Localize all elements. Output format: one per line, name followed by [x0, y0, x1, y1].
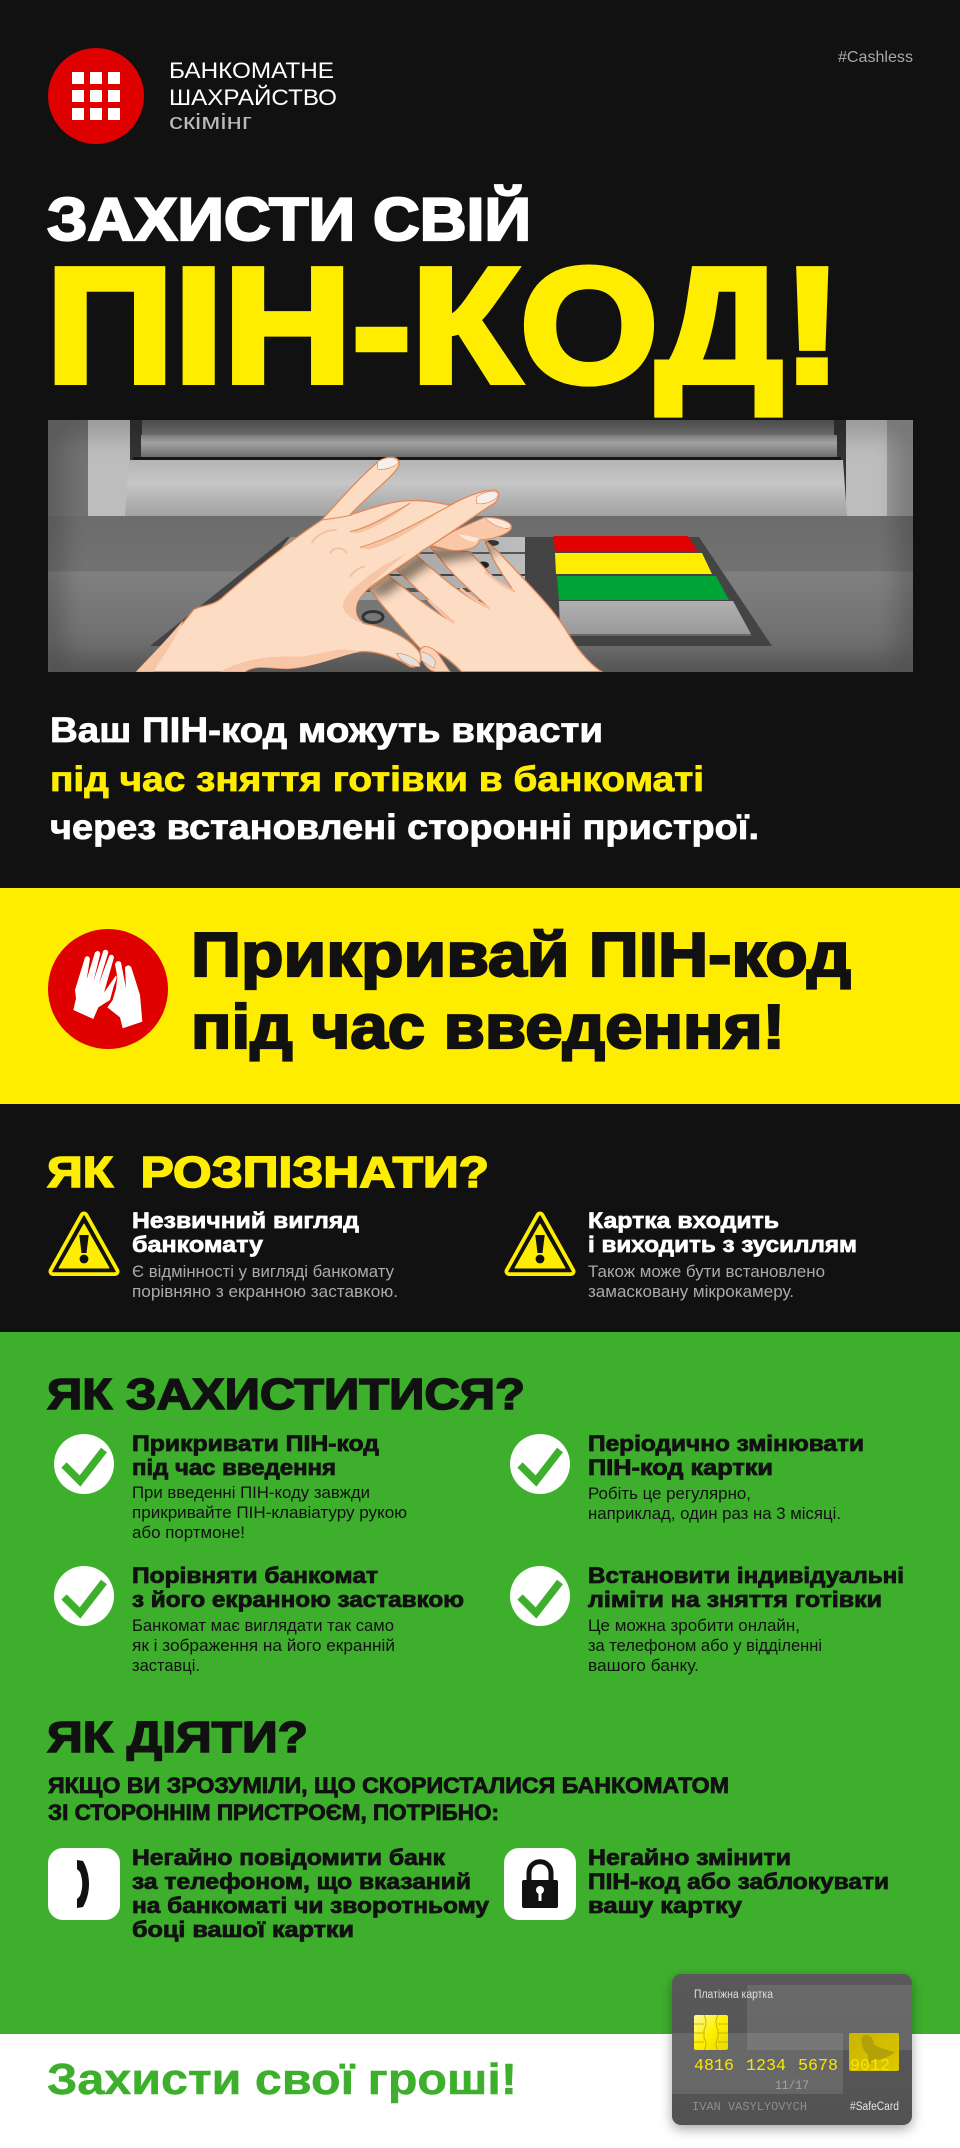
item: notify bank: боці вашої картки — [132, 1917, 354, 1942]
item: card sticks: Також може бути встановлено — [588, 1262, 825, 1281]
item: set limits: Це можна зробити онлайн, — [588, 1616, 800, 1635]
payment card: 11/17 — [775, 2078, 809, 2093]
heading: how to act: ЯК ДІЯТИ? — [47, 1713, 308, 1762]
subheading: if you used a tampered ATM: ЯКЩО ВИ ЗРОЗУМІЛИ, ЩО СКОРИСТАЛИСЯ БАНКОМАТОМ — [48, 1773, 729, 1798]
item: cover PIN: під час введення — [132, 1455, 336, 1480]
item: cover PIN: При введенні ПІН-коду завжди — [132, 1483, 370, 1502]
intro text: Ваш ПІН-код можуть вкрасти — [50, 711, 603, 750]
item: set limits: вашого банку. — [588, 1656, 699, 1675]
hashtag: #Cashless — [838, 49, 913, 66]
item: card sticks: і виходить з зусиллям — [588, 1232, 857, 1257]
title: protect your: ЗАХИСТИ СВІЙ — [47, 186, 531, 253]
item: compare ATM: Банкомат має виглядати так само — [132, 1616, 394, 1635]
heading: cover your PIN: Прикривай ПІН-код — [191, 921, 851, 990]
keypad plate — [150, 536, 772, 647]
item: notify bank: Негайно повідомити банк — [132, 1845, 446, 1870]
heading: how to recognize: ЯК РОЗПІЗНАТИ? — [47, 1148, 489, 1197]
item: cover PIN: прикривайте ПІН-клавіатуру рукою — [132, 1503, 407, 1522]
item: compare ATM: з його екранною заставкою — [132, 1587, 464, 1612]
card chip — [694, 2015, 728, 2050]
item: change PIN or block card: вашу картку — [588, 1893, 743, 1918]
item: unusual ATM look — [132, 1208, 398, 1301]
item: set limits: Встановити індивідуальні — [588, 1563, 904, 1588]
payment card: Платіжна картка — [694, 1989, 774, 2001]
subheading: if you used a tampered ATM: ЗІ СТОРОННІМ ПРИСТРОЄМ, ПОТРІБНО: — [48, 1800, 499, 1825]
icon: covering hands — [48, 929, 168, 1049]
intro text: через встановлені сторонні пристрої. — [50, 808, 759, 847]
item: card sticks: замасковану мікрокамеру. — [588, 1282, 794, 1301]
panel: black header background — [0, 0, 960, 888]
item: change PIN: Робіть це регулярно, — [588, 1484, 751, 1503]
payment card: IVAN VASYLYOVYCH — [692, 2100, 807, 2114]
item: change PIN or block card — [588, 1845, 889, 1918]
item: card sticks: Картка входить — [588, 1208, 779, 1233]
item: set limits — [588, 1563, 904, 1675]
logo text: topic name — [169, 58, 337, 134]
icon: warning triangle left — [53, 1216, 115, 1272]
panel: white footer — [0, 2034, 960, 2148]
panel: green section — [0, 1332, 960, 2034]
icon: check 2 — [510, 1434, 570, 1494]
item: compare ATM: заставці. — [132, 1656, 200, 1675]
item: change PIN or block card: Негайно змінити — [588, 1845, 791, 1870]
item: compare ATM: Порівняти банкомат — [132, 1563, 378, 1588]
icon: check 1 — [54, 1434, 114, 1494]
footer slogan: Захисти свої гроші! — [47, 2055, 517, 2104]
item: compare ATM: як і зображення на його екранній — [132, 1636, 395, 1655]
item: unusual ATM look: порівняно з екранною заставкою. — [132, 1282, 398, 1301]
item: notify bank: за телефоном, що вказаний — [132, 1869, 471, 1894]
intro text: під час зняття готівки в банкоматі — [50, 760, 704, 799]
item: change PIN: Періодично змінювати — [588, 1431, 864, 1456]
icon: check 4 — [510, 1566, 570, 1626]
subheading: if you used a tampered ATM — [48, 1773, 729, 1825]
card number: 4816 — [694, 2057, 734, 2076]
item: card sticks — [588, 1208, 857, 1301]
illustration: hands covering ATM keypad — [48, 420, 913, 672]
card number: 9012 — [850, 2057, 890, 2076]
icon: warning triangle right — [509, 1216, 571, 1272]
item: cover PIN: Прикривати ПІН-код — [132, 1431, 379, 1456]
payment card — [672, 1974, 912, 2125]
hands — [137, 457, 602, 672]
item: unusual ATM look: банкомату — [132, 1232, 264, 1257]
item: unusual ATM look: Незвичний вигляд — [132, 1208, 359, 1233]
panel: yellow call-to-action band — [0, 888, 960, 1104]
item: unusual ATM look: Є відмінності у вигляді банкомату — [132, 1262, 394, 1281]
item: notify bank — [132, 1845, 490, 1942]
heading: how to protect: ЯК ЗАХИСТИТИСЯ? — [47, 1370, 525, 1419]
icon: check 3 — [54, 1566, 114, 1626]
item: change PIN: наприклад, один раз на 3 місяці. — [588, 1504, 841, 1523]
item: change PIN — [588, 1431, 864, 1523]
heading: cover your PIN: під час введення! — [191, 993, 785, 1062]
item: compare ATM — [132, 1563, 464, 1675]
vignette — [48, 420, 913, 672]
icon: lock — [504, 1848, 576, 1920]
title: PIN code: ПІН-КОД! — [46, 234, 842, 417]
card number: 5678 — [798, 2057, 838, 2076]
item: set limits: ліміти на зняття готівки — [588, 1587, 882, 1612]
logo text: topic name: ШАХРАЙСТВО — [169, 85, 337, 110]
heading: cover your PIN — [191, 921, 851, 1062]
intro text — [50, 711, 759, 847]
item: notify bank: на банкоматі чи зворотньому — [132, 1893, 490, 1918]
item: change PIN: ПІН-код картки — [588, 1455, 773, 1480]
logo: red circle with keypad — [48, 48, 144, 144]
logo text: topic name: скімінг — [169, 109, 252, 134]
payment card: #SafeCard — [850, 2101, 899, 2113]
item: cover PIN: або портмоне! — [132, 1523, 245, 1542]
panel: how to recognize — [0, 1104, 960, 1332]
card number — [694, 2057, 890, 2076]
card hologram — [849, 2033, 899, 2071]
item: cover PIN — [132, 1431, 407, 1542]
card number: 1234 — [746, 2057, 786, 2076]
item: change PIN or block card: ПІН-код або заблокувати — [588, 1869, 889, 1894]
logo text: topic name: БАНКОМАТНЕ — [169, 58, 334, 83]
icon: phone — [48, 1848, 120, 1920]
item: set limits: за телефоном або у відділенні — [588, 1636, 822, 1655]
